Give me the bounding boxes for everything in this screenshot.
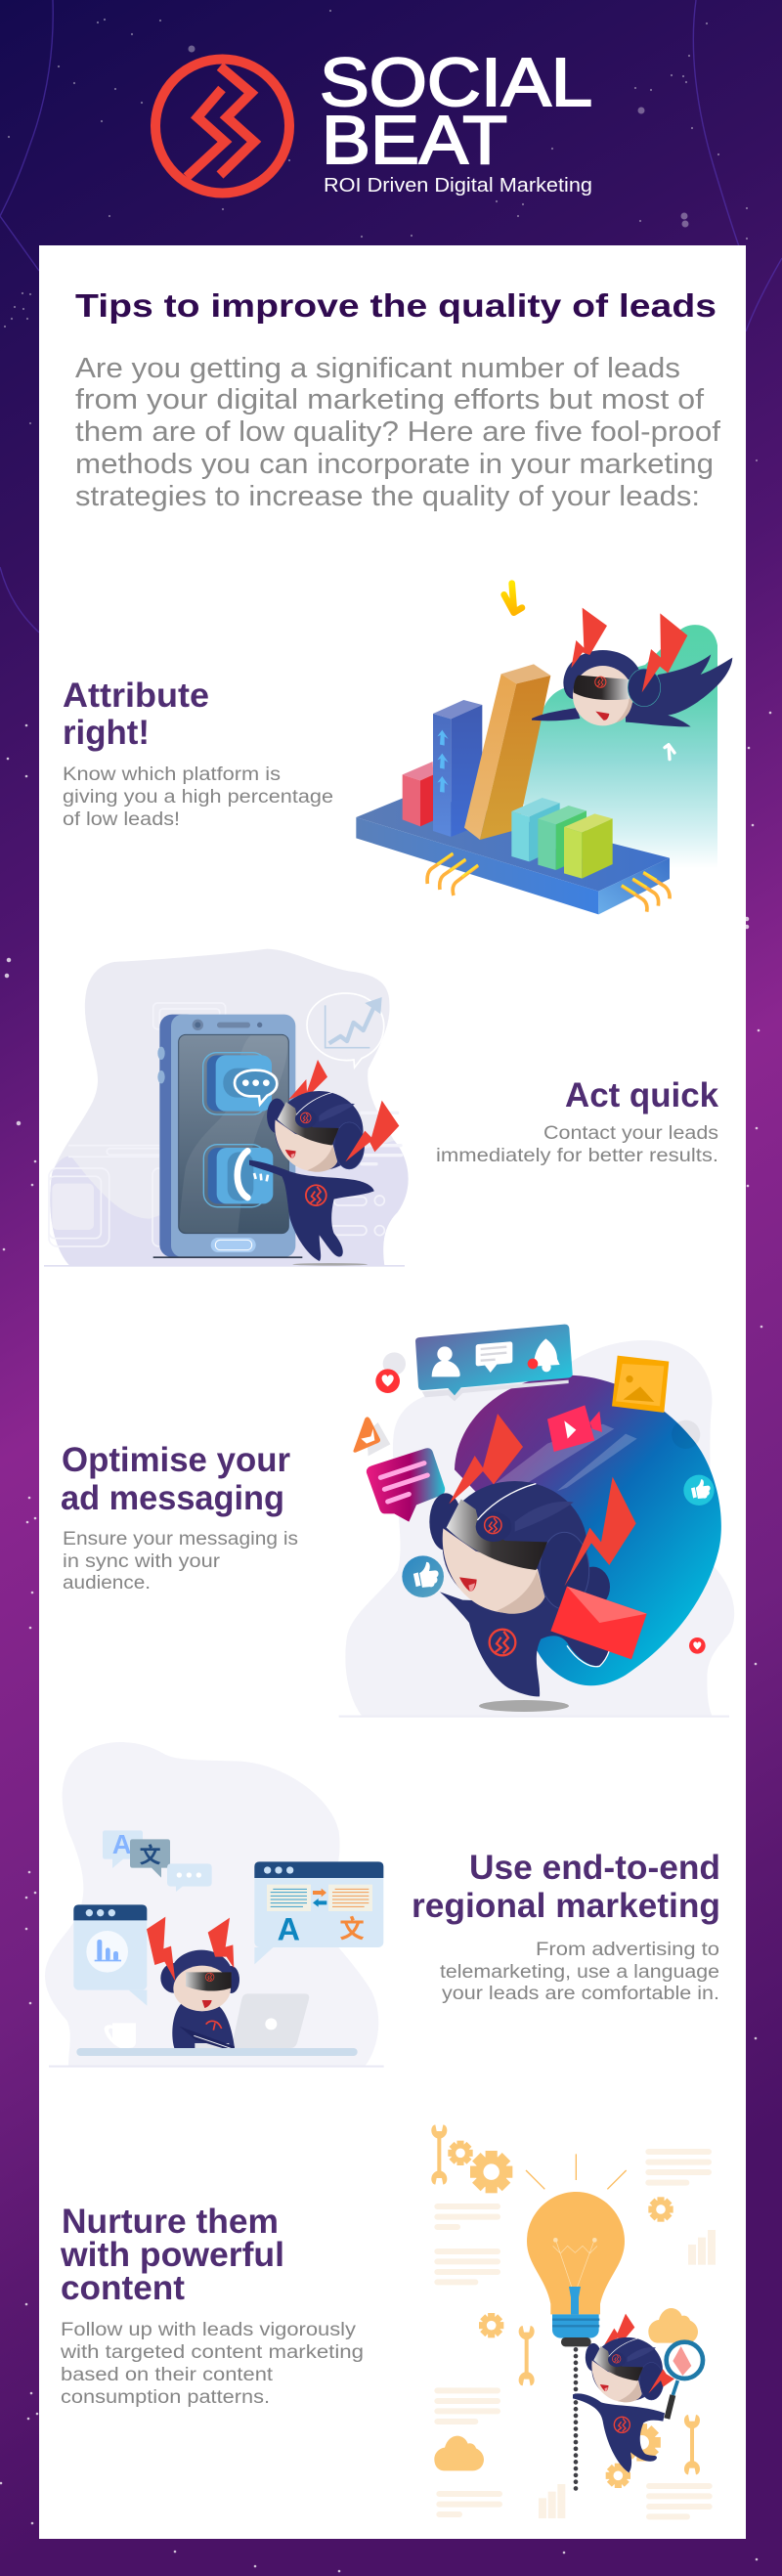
icon: picture card <box>612 1356 669 1413</box>
illustration: mascot with social media icons <box>339 1325 734 1718</box>
gradient swirl <box>455 1375 721 1685</box>
body text: nurture with content: consumption patterns. <box>61 2387 270 2408</box>
browser window with translation: 文 <box>339 1916 365 1943</box>
heading: nurture with content: content <box>61 2269 185 2307</box>
heading: nurture with content: with powerful <box>60 2236 284 2274</box>
heading: attribute right: Attribute <box>63 677 209 715</box>
icon: music triangle <box>353 1417 390 1456</box>
translation speech bubbles <box>103 1829 212 1892</box>
body text: attribute right <box>63 764 333 830</box>
mascot with magnifying glass <box>573 2314 703 2472</box>
platform <box>356 793 670 914</box>
logo wordmark: ROI Driven Digital Marketing <box>324 175 592 196</box>
mascot flying <box>532 608 732 726</box>
body text: attribute right: giving you a high percentage <box>63 787 333 808</box>
panel: end-to-end regional marketing <box>45 1742 720 2068</box>
illustration: mascot with light bulb <box>431 2124 716 2518</box>
text placeholder lines <box>437 2152 710 2516</box>
illustration: bar chart platform with flying mascot <box>356 584 732 914</box>
notification bar <box>415 1325 573 1401</box>
translation speech bubbles: 文 <box>140 1844 161 1868</box>
body text: nurture with content: Follow up with leads vigorously <box>61 2320 357 2340</box>
panel: optimise your ad messaging <box>61 1325 734 1718</box>
body text: optimise your ad messaging: audience. <box>63 1573 151 1594</box>
icon: chat app <box>203 1053 277 1114</box>
browser window with translation <box>254 1861 383 1964</box>
cyan bar <box>511 798 560 861</box>
lime bar <box>564 813 613 879</box>
browser window with chart <box>73 1904 147 2006</box>
browser window with translation: A <box>278 1911 300 1946</box>
translation speech bubbles: A <box>112 1829 132 1859</box>
title: Tips to improve the quality of leads <box>75 287 717 324</box>
bead chain <box>569 2349 583 2490</box>
heading: nurture with content: Nurture them <box>62 2203 279 2241</box>
body text: act quick: Contact your leads <box>543 1123 718 1144</box>
body text: act quick: immediately for better results. <box>436 1146 718 1166</box>
logo wordmark: BEAT <box>322 102 507 178</box>
light bulb <box>526 2154 627 2346</box>
logo emblem <box>155 59 289 194</box>
body text: attribute right: of low leads! <box>63 809 180 830</box>
blue bar with arrows <box>433 700 482 837</box>
heading: optimise your ad messaging: ad messaging <box>61 1479 284 1517</box>
body text: nurture with content <box>60 2320 364 2408</box>
icon: like badge left <box>402 1555 444 1597</box>
body text: attribute right: Know which platform is <box>63 764 281 785</box>
desk <box>76 2048 358 2056</box>
icon: yellow arrow <box>504 584 522 613</box>
green bar <box>538 806 586 870</box>
illustration: mascot at laptop with translation windows <box>45 1742 384 2068</box>
icon: like badge right <box>683 1475 715 1506</box>
icon: white arrow <box>665 745 674 760</box>
gears, wrenches and clouds <box>431 2124 700 2488</box>
intro paragraph: them are of low quality? Here are five fool-proof <box>75 416 721 448</box>
heading: regional marketing <box>412 1849 720 1925</box>
body text: optimise your ad messaging <box>63 1529 298 1594</box>
header: brand logo <box>155 44 592 196</box>
body text: optimise your ad messaging: Ensure your messaging is <box>63 1529 298 1550</box>
heading: attribute right: right! <box>63 714 150 752</box>
panel: act quick <box>44 949 719 1267</box>
illustration: mascot tapping phone <box>44 949 409 1267</box>
phone <box>153 1015 302 1258</box>
panel: attribute right <box>63 584 732 914</box>
coffee mug <box>105 2023 136 2048</box>
intro paragraph: strategies to increase the quality of your leads: <box>75 481 700 512</box>
speech bubble with growth chart <box>307 993 384 1068</box>
mascot at phone <box>249 1060 399 1266</box>
logo wordmark: SOCIAL <box>320 44 592 120</box>
body text: regional marketing: From advertising to <box>536 1940 719 1960</box>
intro paragraph: Are you getting a significant number of leads <box>75 353 680 384</box>
heading: attribute right <box>63 677 209 752</box>
body text: regional marketing <box>440 1940 719 2004</box>
icon: message bubble <box>367 1448 445 1522</box>
heading: nurture with content <box>60 2203 284 2307</box>
icon: video camera <box>547 1405 602 1452</box>
orange bar <box>464 664 550 840</box>
icon: heart badge <box>375 1352 406 1393</box>
heading: regional marketing: Use end-to-end <box>469 1849 720 1887</box>
body text: regional marketing: your leads are comfortable in. <box>442 1984 719 2004</box>
heading: regional marketing: regional marketing <box>412 1887 720 1925</box>
panel: nurture with content <box>60 2124 716 2518</box>
body text: act quick <box>436 1123 718 1166</box>
logo wordmark <box>320 44 592 196</box>
background curves <box>0 0 782 633</box>
mascot shadow <box>479 1700 569 1712</box>
mascot with envelope <box>429 1414 647 1696</box>
icon: small heart <box>689 1637 706 1654</box>
small bar charts <box>539 2230 716 2518</box>
body text: nurture with content: with targeted content marketing <box>60 2342 364 2363</box>
intro paragraph: methods you can incorporate in your marketing <box>75 449 714 480</box>
heading: optimise your ad messaging: Optimise your <box>62 1441 290 1479</box>
laptop <box>232 1993 309 2048</box>
mascot at desk <box>147 1917 239 2051</box>
body text: nurture with content: based on their content <box>61 2365 274 2385</box>
intro paragraph <box>75 353 721 512</box>
red bar <box>403 762 433 826</box>
icon: phone call app <box>203 1145 273 1207</box>
heading: optimise your ad messaging <box>61 1441 290 1517</box>
body text: regional marketing: telemarketing, use a language <box>440 1962 719 1983</box>
intro paragraph: from your digital marketing efforts but most of <box>75 384 705 415</box>
body text: optimise your ad messaging: in sync with your <box>63 1551 221 1572</box>
platform prongs <box>427 853 670 912</box>
heading: act quick: Act quick <box>565 1076 719 1114</box>
